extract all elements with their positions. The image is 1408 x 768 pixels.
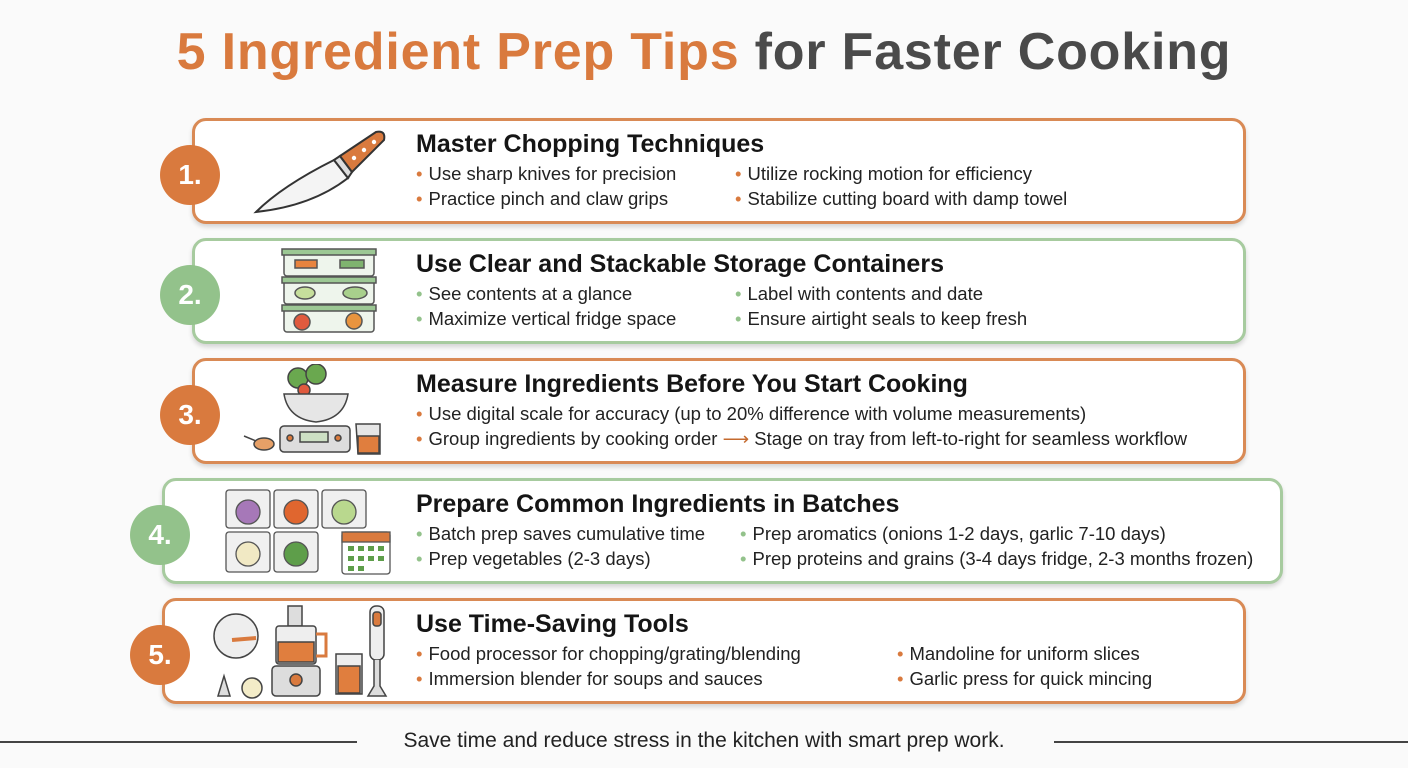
- heading 1: Master Chopping Techniques: [416, 130, 764, 158]
- icon: knife: [253, 130, 386, 214]
- text: Stabilize cutting board with damp towel: [747, 188, 1067, 209]
- text: Label with contents and date: [747, 283, 983, 304]
- heading 2: Use Clear and Stackable Storage Containers: [416, 250, 944, 278]
- text: Prep proteins and grains (3-4 days fridge, 2-3 months frozen): [752, 548, 1253, 569]
- bullets 4: Batch prep saves cumulative time: [428, 523, 705, 544]
- text: Utilize rocking motion for efficiency: [747, 163, 1032, 184]
- title: 5 Ingredient Prep Tips for Faster Cooking: [177, 23, 1231, 81]
- text: Maximize vertical fridge space: [428, 308, 676, 329]
- number badge 3: 3.: [178, 399, 202, 430]
- text: Group ingredients by cooking order ⟶ Stage on tray from left-to-right for seamless workflow: [428, 428, 1187, 449]
- heading 4: Prepare Common Ingredients in Batches: [416, 490, 899, 518]
- number badge 3: [160, 385, 220, 445]
- number badge 4: [130, 505, 190, 565]
- panel: tip 4: [162, 478, 1283, 584]
- number badge 5: 5.: [148, 639, 172, 670]
- bullets 5: Food processor for chopping/grating/blending: [428, 643, 801, 664]
- text: Practice pinch and claw grips: [428, 188, 668, 209]
- text: Mandoline for uniform slices: [909, 643, 1140, 664]
- number badge 2: [160, 265, 220, 325]
- number badge 1: 1.: [178, 159, 202, 190]
- panel: tip 5: [162, 598, 1246, 704]
- panel: tip 1: [192, 118, 1246, 224]
- icon: batch containers: [225, 489, 391, 575]
- heading 3: Measure Ingredients Before You Start Cooking: [416, 370, 968, 398]
- panel: tip 3: [192, 358, 1246, 464]
- text: Garlic press for quick mincing: [909, 668, 1152, 689]
- heading 5: Use Time-Saving Tools: [416, 610, 689, 638]
- number badge 4: 4.: [148, 519, 172, 550]
- text: Ensure airtight seals to keep fresh: [747, 308, 1027, 329]
- icon: tools: [213, 605, 388, 699]
- bullets 2: See contents at a glance: [428, 283, 632, 304]
- panel: tip 2: [192, 238, 1246, 344]
- text: Prep vegetables (2-3 days): [428, 548, 651, 569]
- icon: scale: [244, 364, 381, 455]
- icon: containers: [281, 248, 377, 333]
- bullets 1: Use sharp knives for precision: [428, 163, 676, 184]
- number badge 5: [130, 625, 190, 685]
- number badge 2: 2.: [178, 279, 202, 310]
- text: Prep aromatics (onions 1-2 days, garlic 7-10 days): [752, 523, 1166, 544]
- number badge 1: [160, 145, 220, 205]
- bullets 3: Use digital scale for accuracy (up to 20% difference with volume measurements): [428, 403, 1086, 424]
- footer tagline: Save time and reduce stress in the kitchen with smart prep work.: [403, 729, 1005, 752]
- text: Immersion blender for soups and sauces: [428, 668, 763, 689]
